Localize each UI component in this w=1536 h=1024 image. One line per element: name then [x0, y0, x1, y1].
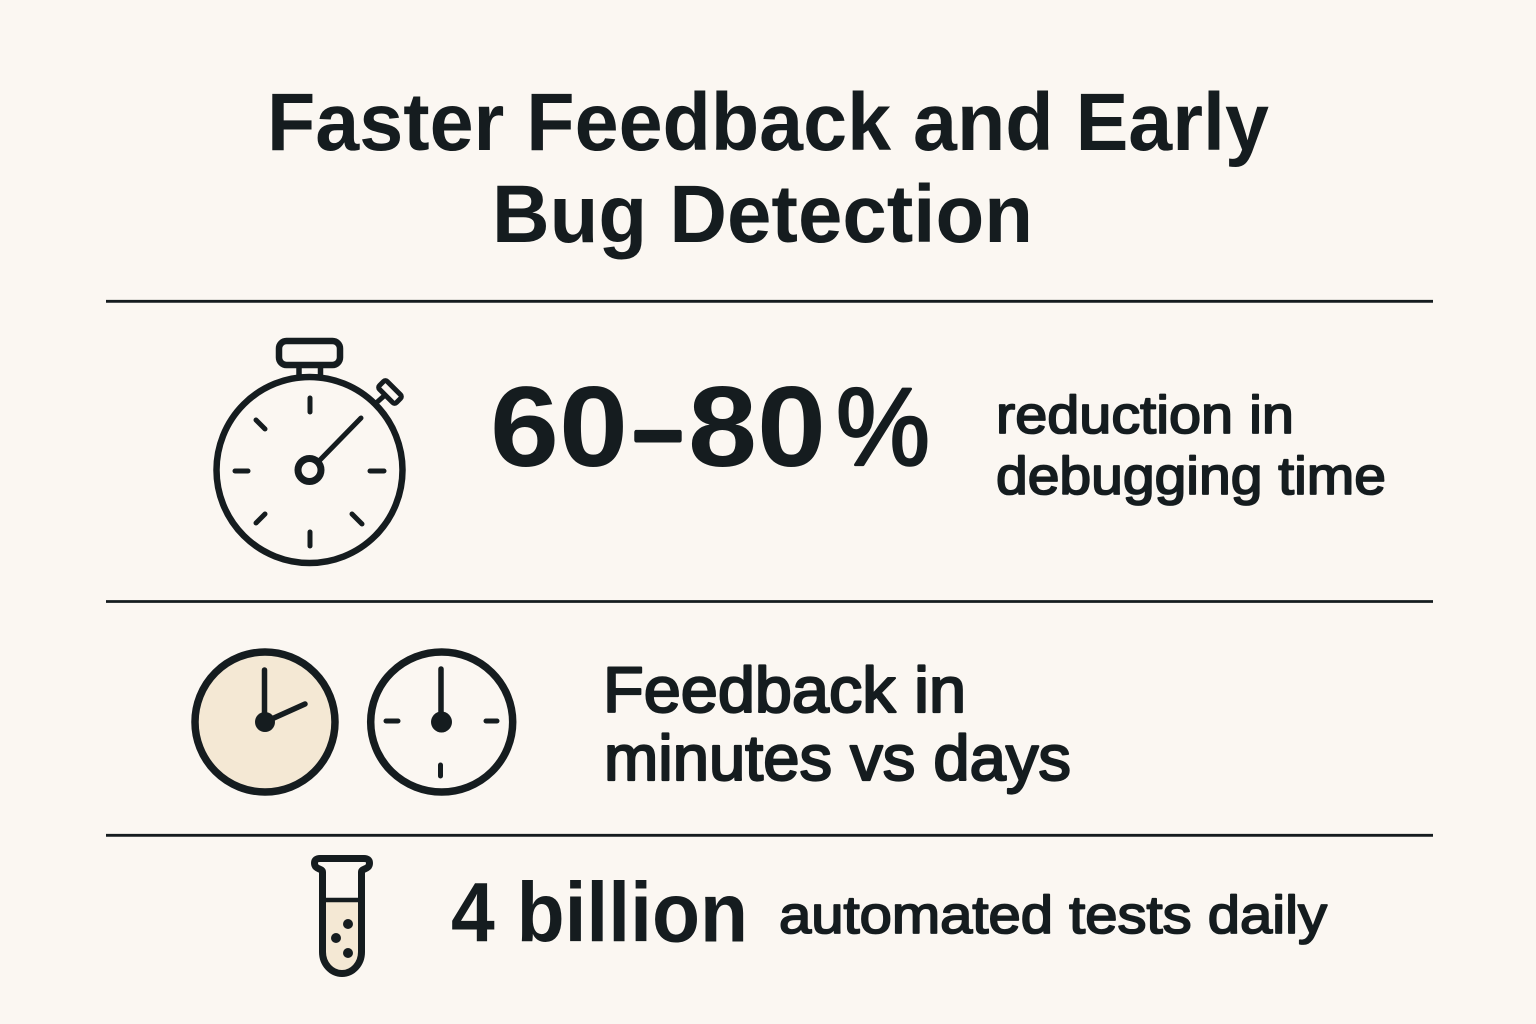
- stat: 60–80 %: –: [636, 363, 680, 490]
- label: reduction in debugging time: [996, 386, 1386, 506]
- panel: debugging time reduction: [216, 341, 1386, 563]
- stat: 60–80 %: 60: [490, 364, 628, 491]
- icon: outline clock: [371, 652, 513, 792]
- stat: 60–80 %: [490, 363, 930, 491]
- title: [267, 77, 1269, 260]
- panel: feedback speed: [195, 652, 1071, 794]
- stat: 60–80 %: 80: [688, 364, 826, 491]
- label: feedback in minutes vs days: Feedback in: [603, 654, 966, 726]
- label: feedback in minutes vs days: [603, 654, 1071, 794]
- label: automated tests daily: automated tests daily: [779, 886, 1328, 945]
- stat: 4 billion: 4 billion: [451, 866, 748, 960]
- icon: stopwatch: [216, 341, 402, 563]
- label: reduction in debugging time: reduction in: [996, 386, 1294, 445]
- stat: 60–80 %: %: [836, 366, 930, 489]
- label: reduction in debugging time: debugging time: [996, 447, 1386, 506]
- icon: filled clock: [195, 652, 335, 792]
- label: feedback in minutes vs days: minutes vs days: [604, 722, 1071, 794]
- title: Bug Detection: [492, 169, 1033, 260]
- panel: automated tests: [314, 858, 1328, 973]
- title: Faster Feedback and Early: [267, 77, 1269, 168]
- icon: test tube: [314, 858, 370, 973]
